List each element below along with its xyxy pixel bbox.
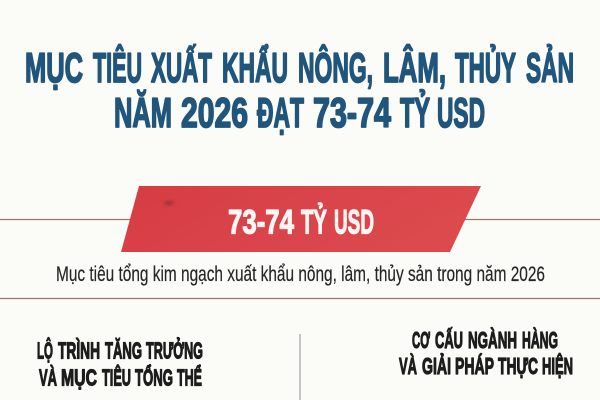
- right section heading: GIẢI: [422, 351, 451, 379]
- title: 2026: [181, 89, 248, 136]
- title: XUẤT: [151, 44, 212, 91]
- title: TIÊU: [93, 43, 142, 91]
- right section heading: HIỆN: [542, 352, 573, 379]
- title: MỤC: [25, 44, 83, 91]
- left section heading: THỂ: [177, 364, 202, 390]
- right section heading: CẤU: [435, 326, 463, 353]
- title: 73-74: [313, 89, 391, 136]
- left section heading: TRƯỞNG: [146, 336, 203, 364]
- left section heading: TIÊU: [102, 364, 131, 390]
- banner value: USD: [334, 204, 374, 242]
- banner value: [228, 204, 374, 242]
- left section heading: [37, 336, 203, 390]
- left section heading: VÀ: [39, 364, 57, 390]
- banner value: 73-74: [228, 204, 294, 242]
- title: LÂM,: [383, 43, 446, 91]
- left section heading: TỔNG: [135, 364, 173, 390]
- right section heading: NGÀNH: [468, 326, 517, 353]
- right section heading: VÀ: [399, 352, 417, 379]
- left section heading: TRÌNH: [58, 336, 100, 364]
- title: NĂM: [114, 89, 172, 136]
- right section heading: PHÁP: [455, 352, 494, 379]
- title: ĐẠT: [257, 89, 304, 136]
- red banner: [121, 186, 481, 252]
- right section heading: HÀNG: [522, 326, 558, 353]
- banner value: TỶ: [301, 204, 327, 242]
- title: THỦY: [455, 43, 516, 91]
- right section heading: [399, 326, 573, 379]
- title: [25, 43, 574, 136]
- title: KHẨU: [222, 43, 288, 91]
- right section heading: CƠ: [412, 327, 430, 353]
- title: NÔNG,: [298, 43, 373, 91]
- title: USD: [437, 89, 485, 136]
- title: TỶ: [400, 88, 430, 136]
- left section heading: TĂNG: [105, 336, 142, 364]
- left section heading: MỤC: [61, 364, 97, 390]
- left section heading: LỘ: [37, 336, 53, 364]
- right section heading: THỰC: [498, 353, 538, 379]
